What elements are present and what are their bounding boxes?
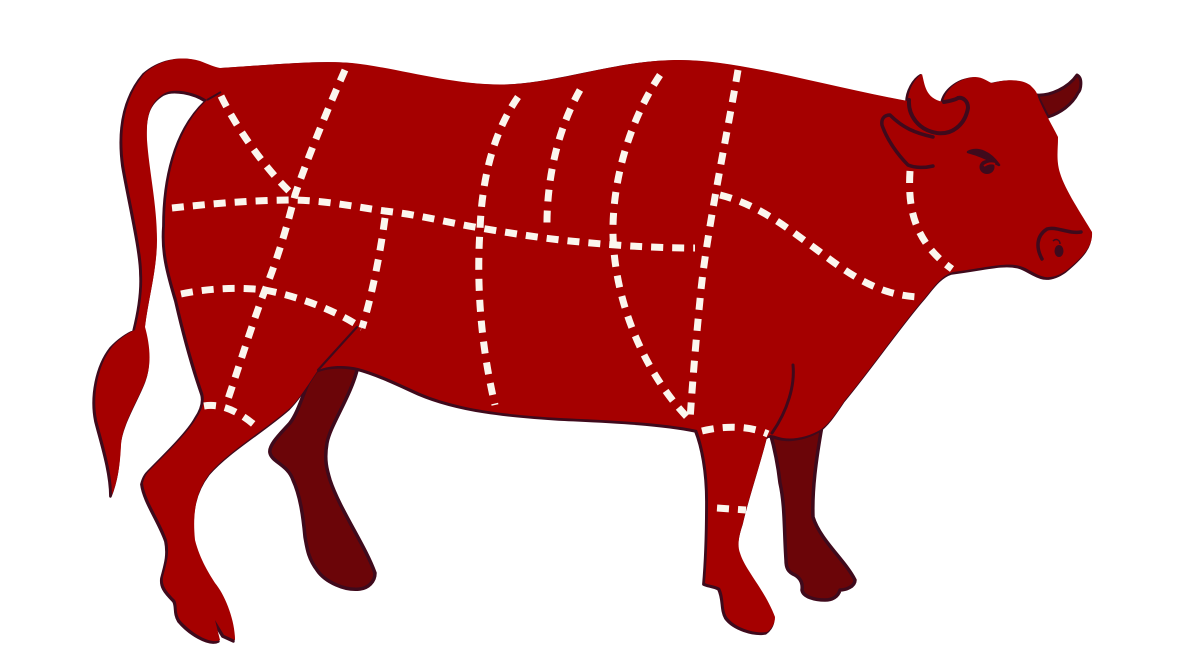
far hind leg (270, 362, 375, 589)
far front leg (770, 426, 855, 600)
cut line: rib and loin two (547, 90, 580, 231)
cut line: round horizontal (181, 288, 362, 328)
ear and near horn outline (882, 98, 968, 167)
far horn (1037, 75, 1081, 117)
icon: nose and nostril (1038, 228, 1081, 259)
cut line: main horizontal (172, 200, 695, 248)
cut line: front knee (702, 427, 768, 434)
cut line: hind knee (204, 405, 258, 428)
bull body silhouette with tail (94, 58, 1092, 642)
dashed cut lines (172, 70, 952, 510)
cut line: rib and loin one (479, 97, 518, 405)
cut line: flank (362, 218, 385, 328)
cut line: front shank (717, 508, 746, 510)
cut line: chuck straight (690, 70, 738, 420)
cut line: rump diagonal (221, 96, 290, 192)
icon: eye (968, 150, 999, 174)
cut line: neck (910, 171, 952, 269)
cut line: chuck curve (613, 75, 690, 420)
cut line: shoulder to chest (720, 195, 920, 297)
cut line: sirloin to hind shank (226, 70, 345, 405)
